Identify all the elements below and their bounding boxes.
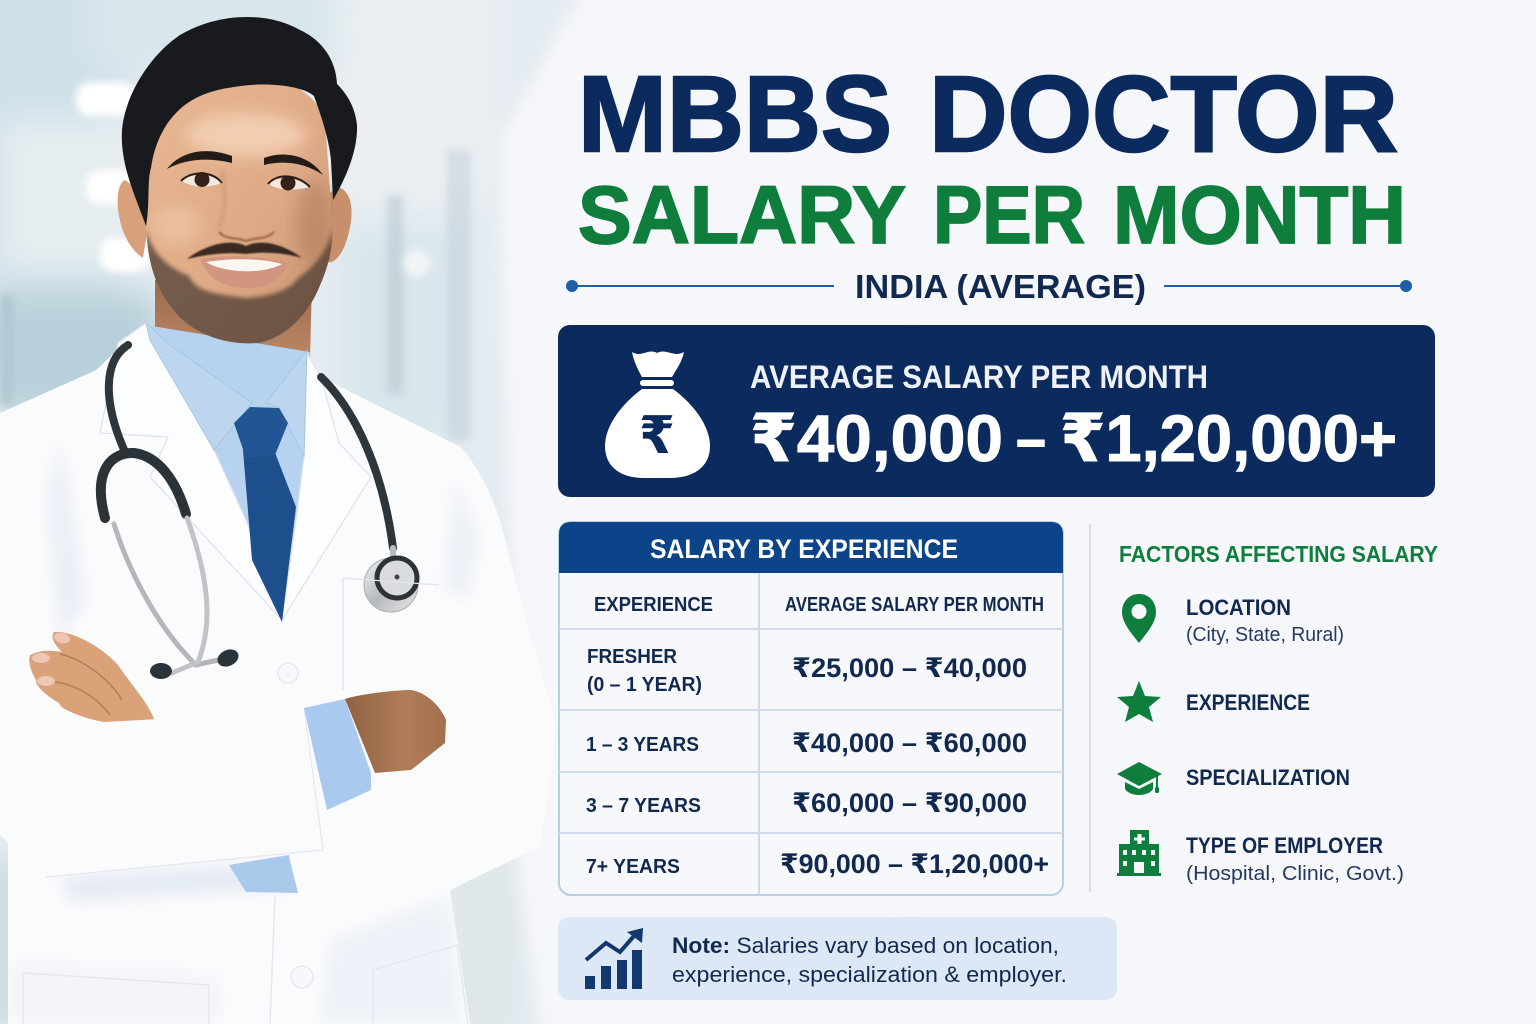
panel: note: [558, 917, 1117, 1000]
icon: rising chart: [585, 928, 643, 989]
factor: location: (City, State, Rural): [1186, 624, 1344, 646]
beard: [146, 226, 333, 350]
coat lapels: [100, 323, 371, 620]
doctor portrait: [0, 17, 555, 1024]
row: fresher: ₹25,000 – ₹40,000: [792, 653, 1027, 683]
row: 7+ years: [586, 849, 1049, 879]
title: MBBS DOCTOR: [578, 53, 1398, 174]
mustache: [187, 243, 302, 259]
title: salary per month: SALARY: [578, 170, 906, 261]
row: 7+ years: 7+ YEARS: [586, 855, 680, 878]
right hand fist: [345, 690, 446, 773]
row: 1-3 years: [586, 728, 1027, 758]
banner salary range: ₹1,20,000+: [1060, 401, 1397, 475]
row: fresher: (0 – 1 YEAR): [587, 673, 702, 696]
eyebrows: [167, 151, 323, 175]
icon: money bag with rupee: ₹: [639, 407, 675, 465]
left hand: [29, 631, 155, 727]
banner salary range: ₹40,000: [750, 401, 1003, 475]
nose: [218, 170, 274, 241]
blue tie: [234, 407, 296, 622]
subtitle with divider lines: INDIA (AVERAGE): [855, 268, 1146, 305]
subtitle with divider lines: [566, 268, 1412, 305]
panel: note: experience, specialization & employer.: [672, 962, 1067, 987]
row: 1-3 years: ₹40,000 – ₹60,000: [792, 728, 1027, 758]
factor: specialization: SPECIALIZATION: [1186, 765, 1350, 790]
factor: type of employer: [1117, 830, 1404, 885]
table header: [559, 522, 1063, 573]
cheek highlights: [152, 205, 200, 245]
factor: experience: [1117, 681, 1310, 722]
column headings: EXPERIENCE: [594, 594, 713, 616]
title: salary per month: [578, 170, 1406, 261]
face: [146, 76, 333, 343]
hair: [122, 17, 357, 226]
lower shirt cuff: [229, 855, 298, 893]
column headings: [594, 594, 1044, 616]
ears: [118, 180, 152, 258]
blurred hospital corridor background: [0, 0, 900, 1024]
title: MBBS DOCTOR: DOCTOR: [929, 53, 1398, 174]
stethoscope: [101, 345, 393, 673]
row: fresher: [587, 645, 1027, 696]
factor: location: LOCATION: [1186, 595, 1291, 620]
factor: type of employer: (Hospital, Clinic, Govt.): [1186, 863, 1404, 885]
eyes: [181, 172, 310, 190]
coat buttons and pockets: [23, 578, 468, 1024]
forearm sleeve: [0, 640, 323, 877]
shirt collar: [146, 323, 307, 457]
banner salary range: –: [1016, 401, 1046, 475]
title: salary per month: PER: [933, 170, 1085, 261]
banner salary range: [750, 401, 1397, 475]
banner label: AVERAGE SALARY PER MONTH: [750, 359, 1208, 395]
factors heading: FACTORS AFFECTING SALARY: [1119, 541, 1438, 567]
row: 1-3 years: 1 – 3 YEARS: [586, 733, 699, 756]
row: 3-7 years: 3 – 7 YEARS: [586, 794, 701, 817]
shirt: [146, 325, 310, 625]
icon: money bag with rupee: [605, 352, 710, 478]
stethoscope ear tips: [150, 646, 241, 679]
title: salary per month: MONTH: [1113, 170, 1406, 261]
panel: factors affecting salary: [1090, 524, 1438, 892]
smile: [200, 256, 288, 288]
factor: experience: EXPERIENCE: [1186, 690, 1310, 715]
table header: SALARY BY EXPERIENCE: [650, 534, 958, 564]
factor: location: [1122, 594, 1344, 646]
title: MBBS DOCTOR: MBBS: [578, 53, 892, 174]
right arm sleeve: [289, 600, 555, 928]
note text: Note: Salaries vary based on location,: [672, 933, 1059, 958]
row: 3-7 years: [586, 788, 1027, 818]
row: 7+ years: ₹90,000 – ₹1,20,000+: [780, 849, 1049, 879]
row: fresher: FRESHER: [587, 645, 677, 668]
panel: average salary banner: [558, 325, 1435, 497]
blue shirt cuff: [304, 699, 371, 810]
stethoscope chest piece: [364, 558, 418, 612]
head: [118, 17, 357, 350]
factor: specialization: [1117, 762, 1350, 795]
column headings: AVERAGE SALARY PER MONTH: [785, 594, 1044, 616]
neck: [155, 280, 312, 410]
factor: type of employer: TYPE OF EMPLOYER: [1186, 833, 1383, 858]
white coat: [0, 323, 555, 1024]
row: 3-7 years: ₹60,000 – ₹90,000: [792, 788, 1027, 818]
panel: salary by experience table: [559, 522, 1063, 895]
